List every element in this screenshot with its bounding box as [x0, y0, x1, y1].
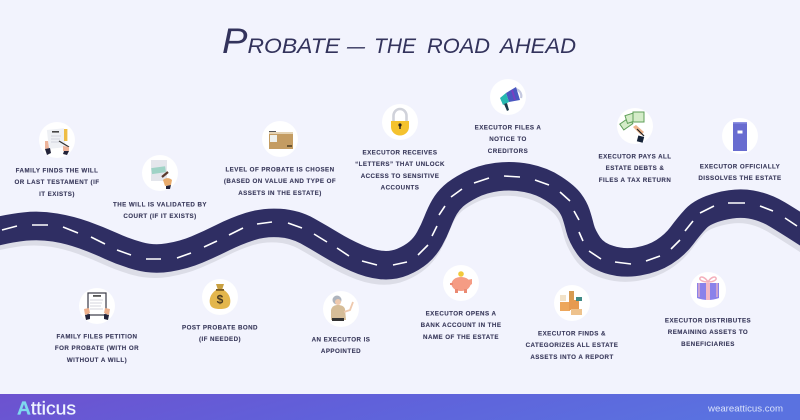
text: APPOINTED [321, 348, 361, 355]
icon: pile of boxes [554, 285, 590, 321]
text [15, 167, 99, 198]
text: THE WILL IS VALIDATED BY [113, 201, 207, 208]
step 5: notice to creditors [475, 79, 541, 155]
icon: folder box [262, 121, 298, 157]
text [475, 124, 541, 155]
title: – [345, 35, 365, 58]
text [55, 333, 139, 364]
text: EXECUTOR OFFICIALLY [700, 163, 781, 170]
text: CREDITORS [488, 148, 528, 155]
text [599, 153, 671, 184]
text: FAMILY FILES PETITION [57, 333, 138, 340]
text: IT EXISTS) [39, 191, 75, 198]
text: ACCOUNTS [381, 184, 419, 192]
text [355, 149, 445, 192]
icon: padlock [382, 104, 418, 140]
text [698, 163, 782, 182]
step 2: will validated by court [113, 155, 207, 220]
text: FAMILY FINDS THE WILL [16, 167, 98, 174]
text: LEVEL OF PROBATE IS CHOSEN [225, 166, 335, 173]
title: PROBATE [222, 22, 341, 61]
icon: money notes and hand [617, 108, 653, 144]
icon: piggy bank [443, 265, 479, 301]
text: EXECUTOR RECEIVES [363, 149, 437, 156]
step 4: executor receives letters [355, 104, 445, 192]
text [421, 310, 501, 341]
text: OR LAST TESTAMENT (IF [15, 179, 99, 186]
text: DISSOLVES THE ESTATE [698, 175, 782, 182]
icon: money bag: $ [217, 292, 224, 306]
text: ASSETS INTO A REPORT [530, 354, 614, 361]
text: COURT (IF IT EXISTS) [123, 213, 197, 220]
title: THE [374, 35, 417, 58]
title: ROAD [427, 35, 490, 58]
text: FOR PROBATE (WITH OR [55, 345, 139, 352]
icon: gift box [690, 272, 726, 308]
step 9: post probate bond [182, 279, 258, 343]
step 12: categorizes assets [526, 285, 618, 361]
icon: clipboard and hands [79, 288, 115, 324]
text: REMAINING ASSETS TO [668, 329, 748, 336]
text: POST PROBATE BOND [182, 324, 258, 331]
text: EXECUTOR PAYS ALL [599, 153, 671, 160]
text: EXECUTOR OPENS A [426, 310, 496, 317]
text: BENEFICIARIES [681, 341, 735, 348]
step 13: distributes assets [665, 272, 751, 348]
text [665, 317, 751, 348]
text: BANK ACCOUNT IN THE [421, 322, 501, 329]
text: EXECUTOR DISTRIBUTES [665, 317, 751, 324]
text: (IF NEEDED) [199, 336, 241, 343]
step 11: opens bank account [421, 265, 501, 341]
step 3: level of probate chosen [224, 121, 336, 197]
text: NOTICE TO [489, 136, 527, 143]
winding road [0, 176, 800, 270]
icon: elderly man [323, 291, 359, 327]
icon: door [722, 118, 758, 154]
icon: megaphone [490, 79, 526, 115]
title: AHEAD [498, 35, 576, 58]
text: NAME OF THE ESTATE [423, 334, 499, 341]
text: AN EXECUTOR IS [312, 336, 370, 343]
title [222, 22, 576, 61]
logo: Atticus: Atticus [17, 398, 76, 418]
step 10: executor appointed [312, 291, 370, 355]
icon: will and hands [39, 122, 75, 158]
text [312, 336, 370, 355]
text [526, 330, 618, 361]
website url: weareatticus.com [707, 404, 783, 414]
footer bar [0, 394, 800, 420]
text: “LETTERS” THAT UNLOCK [355, 161, 445, 168]
text: (BASED ON VALUE AND TYPE OF [224, 178, 336, 185]
text: ESTATE DEBTS & [606, 165, 664, 172]
text [113, 201, 207, 220]
text [182, 324, 258, 343]
text: ACCESS TO SENSITIVE [361, 173, 439, 180]
text: CATEGORIZES ALL ESTATE [526, 342, 618, 349]
icon: document and gavel [142, 155, 178, 191]
text: ASSETS IN THE ESTATE) [238, 190, 322, 197]
text: WITHOUT A WILL) [67, 357, 127, 364]
step 6: pays debts [599, 108, 671, 184]
text: EXECUTOR FINDS & [538, 330, 606, 337]
step 8: family files petition [55, 288, 139, 364]
text: FILES A TAX RETURN [599, 177, 671, 184]
step 1: family finds the will [15, 122, 99, 198]
text: EXECUTOR FILES A [475, 124, 541, 131]
text [224, 166, 336, 197]
step 7: dissolves the estate [698, 118, 782, 182]
